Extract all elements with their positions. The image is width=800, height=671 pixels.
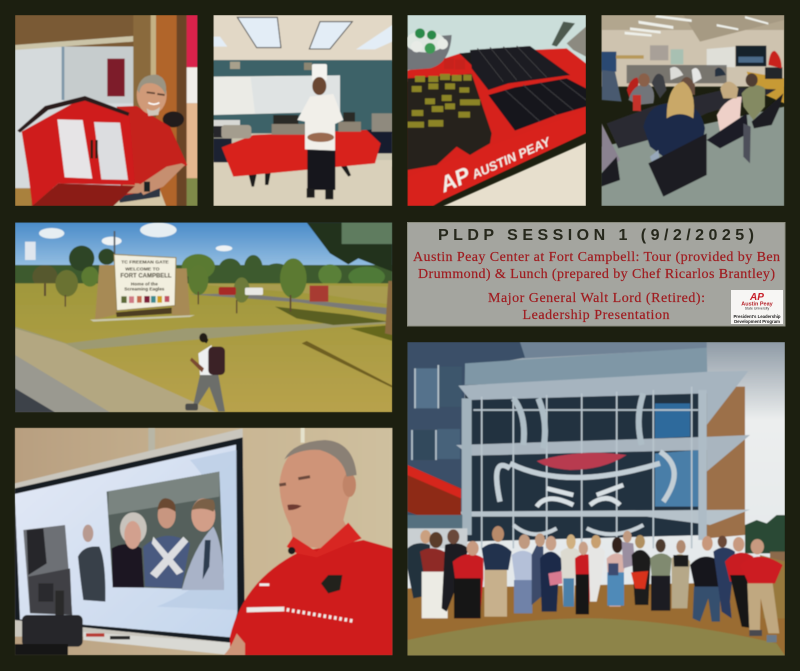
logo: Austin Peay President's Leadership Development Program: Development Program bbox=[734, 319, 780, 324]
photo: Fort Campbell gate sign and lawn bbox=[15, 222, 392, 412]
photo: group portrait in front of Austin Peay building bbox=[407, 342, 785, 656]
sign lettering: Screaming Eagles bbox=[124, 287, 165, 292]
photo: chef at catering table bbox=[213, 15, 392, 206]
heading: PLDP SESSION 1 (9/2/2025) bbox=[438, 227, 754, 244]
sign lettering: TC FREEMAN GATE bbox=[121, 259, 169, 265]
tour and lunch description: Drummond) & Lunch (prepared by Chef Ricarlos Brantley) bbox=[418, 267, 775, 282]
sign lettering: WELCOME TO bbox=[125, 267, 160, 273]
logo: Austin Peay President's Leadership Development Program: AP bbox=[749, 292, 764, 303]
sign lettering: FORT CAMPBELL bbox=[120, 273, 172, 279]
photo: table with notebooks and bookmarks bbox=[405, 15, 586, 206]
sign lettering bbox=[120, 259, 172, 292]
logo: Austin Peay President's Leadership Development Program: Austin Peay bbox=[741, 302, 774, 308]
logo: Austin Peay President's Leadership Development Program: President's Leadership bbox=[733, 314, 781, 319]
banner lettering: APAUSTIN PEAY bbox=[435, 126, 555, 198]
tour and lunch description bbox=[413, 250, 780, 282]
logo: Austin Peay President's Leadership Development Program: State University bbox=[745, 306, 770, 310]
text panel: session details bbox=[408, 222, 785, 326]
presenter description bbox=[488, 291, 705, 323]
photo: man holding red little library box bbox=[15, 15, 198, 206]
tour and lunch description: Austin Peay Center at Fort Campbell: Tour (provided by Ben bbox=[413, 250, 780, 265]
photo: attendees seated at tables during lunch bbox=[601, 15, 784, 206]
presenter description: Major General Walt Lord (Retired): bbox=[488, 291, 705, 306]
photo: Major General Walt Lord presenting at screen bbox=[15, 428, 393, 655]
presenter description: Leadership Presentation bbox=[522, 308, 670, 323]
group of people bbox=[407, 526, 783, 642]
sign lettering: Home of the bbox=[131, 282, 158, 287]
logo: Austin Peay President's Leadership Development Program bbox=[731, 290, 783, 324]
